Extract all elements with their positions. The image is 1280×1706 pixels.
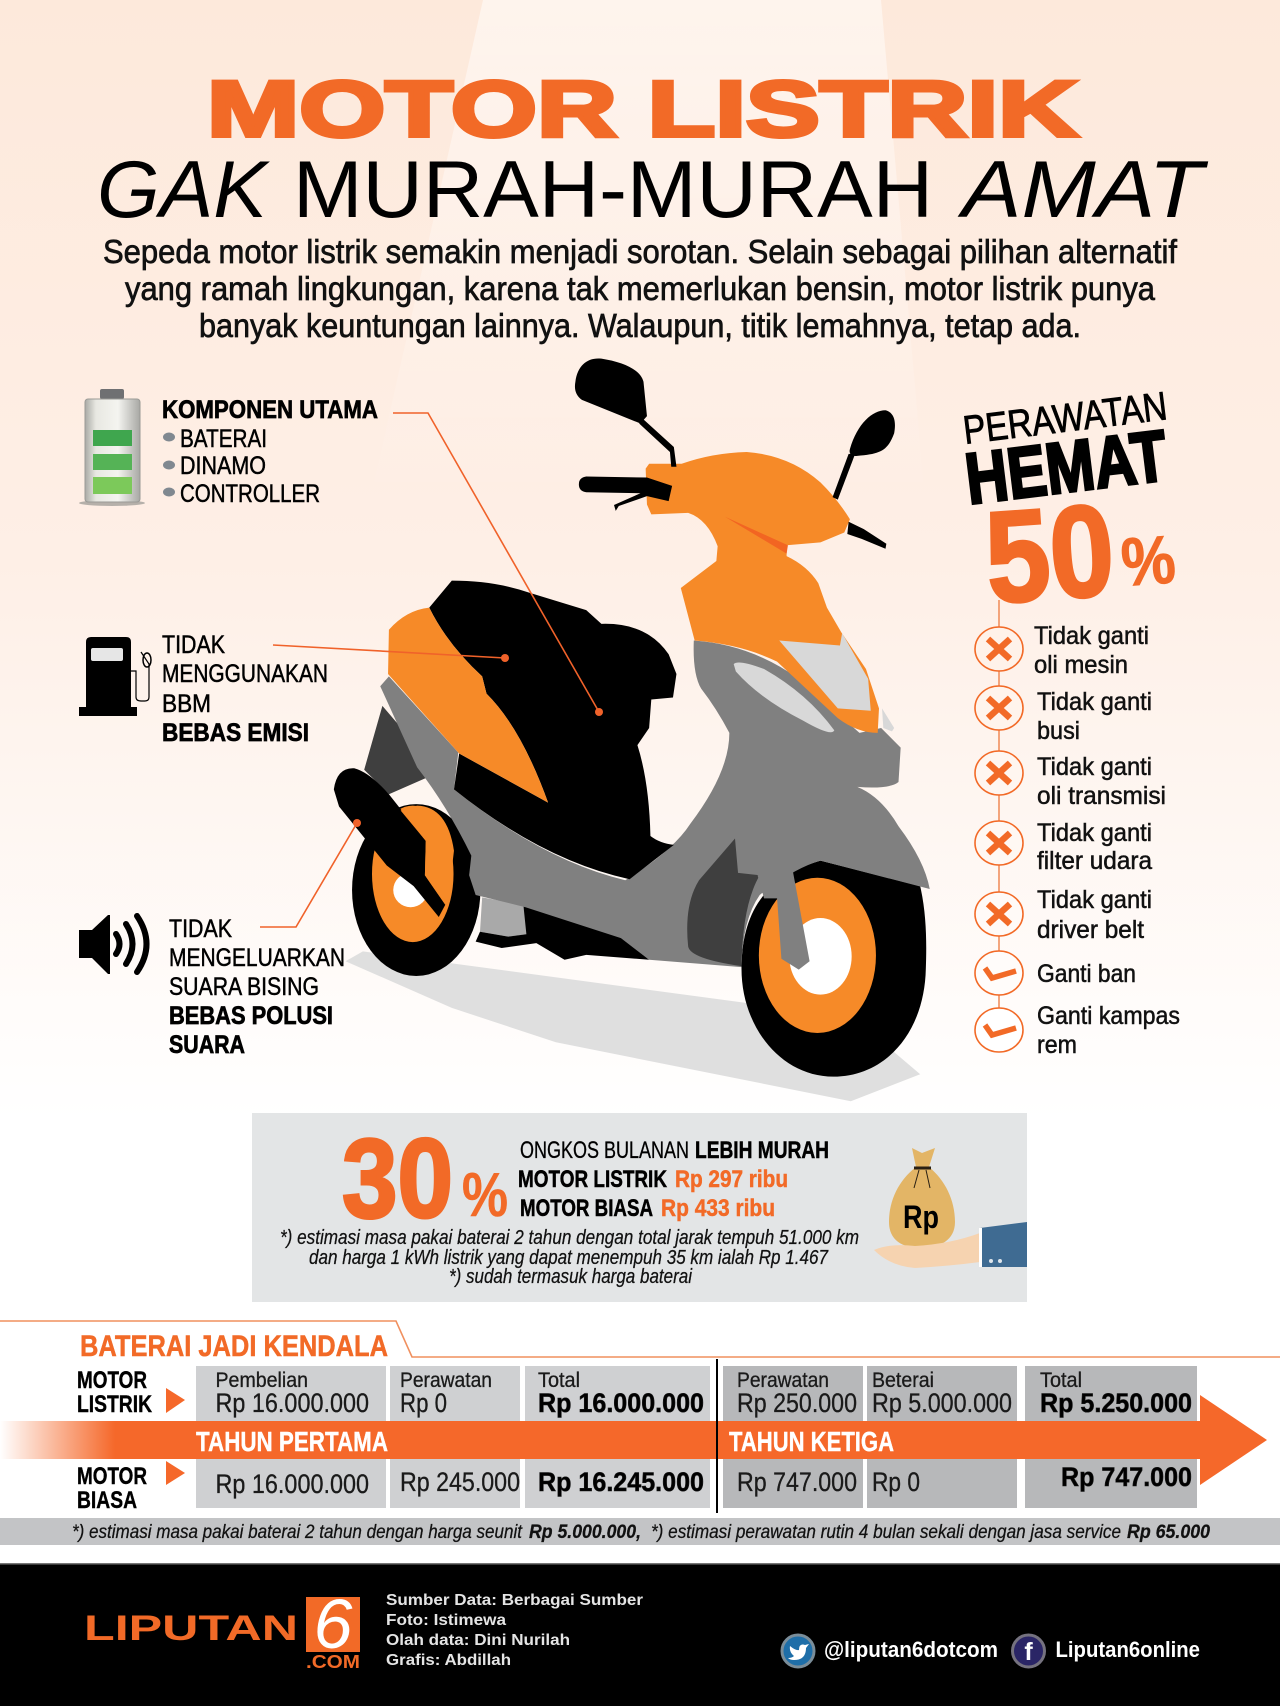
credits: Grafis: Abdillah <box>386 1652 511 1669</box>
electric row values: Pembelian <box>216 1369 308 1392</box>
electric row values: Rp 250.000 <box>737 1388 857 1418</box>
scooter illustration <box>334 358 930 1101</box>
item: filter udara: filter udara <box>1037 847 1152 875</box>
item: driver belt: Tidak ganti <box>1037 886 1152 914</box>
mirrors and handlebars <box>575 358 895 549</box>
regular row values: Rp 0 <box>872 1467 920 1497</box>
item: filter udara: Tidak ganti <box>1037 819 1152 847</box>
no fuel text: MENGGUNAKAN <box>162 660 328 688</box>
item: busi <box>975 686 1152 745</box>
item: ganti ban <box>975 951 1136 995</box>
social: twitter <box>782 1635 998 1667</box>
component list: KOMPONEN UTAMA <box>162 396 378 424</box>
panel: monthly cost <box>252 1113 1027 1302</box>
footnote strip: *) estimasi masa pakai baterai 2 tahun dengan harga seunit <box>72 1522 523 1543</box>
headlight <box>734 662 834 732</box>
row label: motor biasa: BIASA <box>77 1487 137 1514</box>
timeline arrow <box>0 1395 1267 1485</box>
electric row values: Beterai <box>872 1369 934 1392</box>
component list <box>162 396 378 508</box>
rear seat grip <box>334 768 445 917</box>
item: ganti kampas rem <box>975 1002 1180 1059</box>
icon: money bag on hand <box>874 1148 1027 1268</box>
no fuel text <box>162 631 328 747</box>
electric row values: Perawatan <box>400 1369 492 1392</box>
item: oli mesin: oli mesin <box>1034 651 1128 679</box>
icon: battery <box>79 389 145 506</box>
table cells: first year <box>196 1366 710 1508</box>
item: oli transmisi <box>975 751 1166 810</box>
item: busi: Tidak ganti <box>1037 688 1152 716</box>
ground shadow <box>346 951 920 1101</box>
dark front panel <box>687 838 760 966</box>
front wheel <box>742 861 926 1077</box>
title: MURAH-MURAH <box>293 145 933 235</box>
maintenance timeline <box>975 600 1180 1059</box>
title: AMAT <box>958 145 1209 235</box>
no fuel text: BEBAS EMISI <box>162 719 309 747</box>
item: driver belt <box>975 886 1152 944</box>
credits: Sumber Data: Berbagai Sumber <box>386 1592 643 1609</box>
heading: perawatan hemat: PERAWATAN <box>961 384 1170 453</box>
icon: speaker <box>79 915 146 974</box>
electric row values: Rp 16.000.000 <box>216 1388 369 1418</box>
regular row values: Rp 16.245.000 <box>538 1467 704 1497</box>
item: oli transmisi: oli transmisi <box>1037 782 1166 810</box>
rear dark panel <box>364 706 447 794</box>
electric row values: Total <box>538 1369 580 1392</box>
item: oli mesin <box>975 622 1149 679</box>
50 percent: 50 <box>981 476 1119 631</box>
callout lines <box>260 413 599 927</box>
50 percent: % <box>1119 521 1178 601</box>
rear wheel <box>352 804 480 976</box>
intro paragraph: yang ramah lingkungan, karena tak memerlukan bensin, motor listrik punya <box>125 270 1156 307</box>
social: twitter: @liputan6dotcom <box>824 1637 998 1662</box>
footnote strip <box>0 1518 1280 1545</box>
cost footnotes <box>280 1227 859 1288</box>
item: driver belt: driver belt <box>1037 916 1144 944</box>
heading: perawatan hemat <box>961 384 1171 520</box>
cost footnotes: *) sudah termasuk harga baterai <box>449 1266 692 1288</box>
cost footnotes: *) estimasi masa pakai baterai 2 tahun dengan total jarak tempuh 51.000 km <box>280 1227 859 1249</box>
regular row values: Rp 245.000 <box>400 1467 520 1497</box>
row label: motor listrik: LISTRIK <box>77 1391 153 1418</box>
electric row values: Rp 5.250.000 <box>1040 1388 1192 1418</box>
orange front shield <box>646 452 879 733</box>
orange rear fairing <box>388 608 548 803</box>
heading: perawatan hemat: HEMAT <box>961 416 1171 520</box>
cost comparison text: Rp 433 ribu <box>661 1195 775 1222</box>
cost footnotes: dan harga 1 kWh listrik yang dapat menempuh 35 km ialah Rp 1.467 <box>309 1247 829 1269</box>
cost comparison text: Rp 297 ribu <box>675 1166 788 1193</box>
intro paragraph <box>103 233 1178 344</box>
no noise text: MENGELUARKAN <box>169 944 345 972</box>
regular row values: Rp 747.000 <box>1061 1462 1192 1492</box>
credits <box>386 1592 643 1669</box>
front fork <box>758 868 810 970</box>
logo: liputan6 <box>84 1585 360 1672</box>
title: GAK <box>97 145 270 235</box>
grey body <box>380 641 930 967</box>
row label: motor biasa: MOTOR <box>77 1463 147 1490</box>
cost comparison text <box>518 1137 829 1222</box>
regular row values: Rp 16.000.000 <box>216 1469 369 1499</box>
item: oli transmisi: Tidak ganti <box>1037 753 1152 781</box>
table cells: third year <box>723 1366 1197 1508</box>
logo: liputan6: LIPUTAN <box>84 1609 298 1648</box>
title <box>97 64 1209 235</box>
row label: motor listrik <box>77 1367 185 1418</box>
row label: motor biasa <box>77 1461 185 1514</box>
no noise text: SUARA <box>169 1031 245 1059</box>
black seat <box>429 581 676 879</box>
row label: motor listrik: MOTOR <box>77 1367 147 1394</box>
timeline arrow: TAHUN PERTAMA <box>196 1426 388 1457</box>
electric row values: Rp 0 <box>400 1388 447 1418</box>
component list: BATERAI <box>180 425 267 453</box>
component list: CONTROLLER <box>180 480 320 508</box>
social: facebook: Liputan6online <box>1056 1637 1200 1662</box>
item: ganti ban: Ganti ban <box>1037 960 1136 988</box>
cost comparison text: MOTOR LISTRIK <box>518 1166 668 1193</box>
no noise text <box>169 915 345 1059</box>
regular row values: Rp 747.000 <box>737 1467 857 1497</box>
footnote strip: Rp 5.000.000, <box>529 1522 641 1543</box>
section: baterai jadi kendala <box>0 1321 1280 1514</box>
footnote strip: Rp 65.000 <box>1127 1522 1210 1543</box>
timeline arrow: TAHUN KETIGA <box>729 1426 894 1457</box>
logo: liputan6: 6 <box>314 1585 353 1663</box>
electric row values: Total <box>1040 1369 1082 1392</box>
no noise text: SUARA BISING <box>169 973 319 1001</box>
30 percent: % <box>462 1161 508 1230</box>
component list: DINAMO <box>180 452 266 480</box>
regular row values <box>216 1462 1192 1499</box>
title: MOTOR LISTRIK <box>207 64 1078 153</box>
section heading: BATERAI JADI KENDALA <box>80 1330 388 1363</box>
item: ganti kampas rem: Ganti kampas <box>1037 1002 1180 1030</box>
social: facebook <box>1012 1635 1200 1667</box>
cost comparison text: MOTOR BIASA <box>520 1195 653 1222</box>
no noise text: BEBAS POLUSI <box>169 1002 333 1030</box>
cost comparison text: ONGKOS BULANAN <box>520 1137 689 1164</box>
callout dots <box>353 654 603 827</box>
icon: money bag on hand: Rp <box>903 1199 939 1235</box>
credits: Foto: Istimewa <box>386 1612 506 1629</box>
underbody and kickstand <box>480 897 528 937</box>
item: filter udara <box>975 819 1152 875</box>
item: oli mesin: Tidak ganti <box>1034 622 1149 650</box>
windshield <box>779 633 871 711</box>
footer <box>0 1563 1280 1706</box>
social: facebook: f <box>1024 1638 1033 1666</box>
intro paragraph: banyak keuntungan lainnya. Walaupun, titik lemahnya, tetap ada. <box>199 307 1081 344</box>
no noise text: TIDAK <box>169 915 232 943</box>
icon: fuel pump <box>79 637 151 716</box>
credits: Olah data: Dini Nurilah <box>386 1632 570 1649</box>
footnote strip: *) estimasi perawatan rutin 4 bulan sekali dengan jasa service <box>651 1522 1121 1543</box>
logo: liputan6: .COM <box>306 1652 360 1672</box>
electric row values: Rp 5.000.000 <box>872 1388 1012 1418</box>
electric row values: Rp 16.000.000 <box>538 1388 704 1418</box>
item: busi: busi <box>1037 717 1080 745</box>
electric row values <box>216 1369 1192 1418</box>
no fuel text: BBM <box>162 690 211 718</box>
cost comparison text: LEBIH MURAH <box>695 1137 829 1164</box>
30 percent: 30 <box>342 1116 453 1241</box>
no fuel text: TIDAK <box>162 631 225 659</box>
item: ganti kampas rem: rem <box>1037 1031 1077 1059</box>
intro paragraph: Sepeda motor listrik semakin menjadi sorotan. Selain sebagai pilihan alternatif <box>103 233 1178 270</box>
electric row values: Perawatan <box>737 1369 829 1392</box>
